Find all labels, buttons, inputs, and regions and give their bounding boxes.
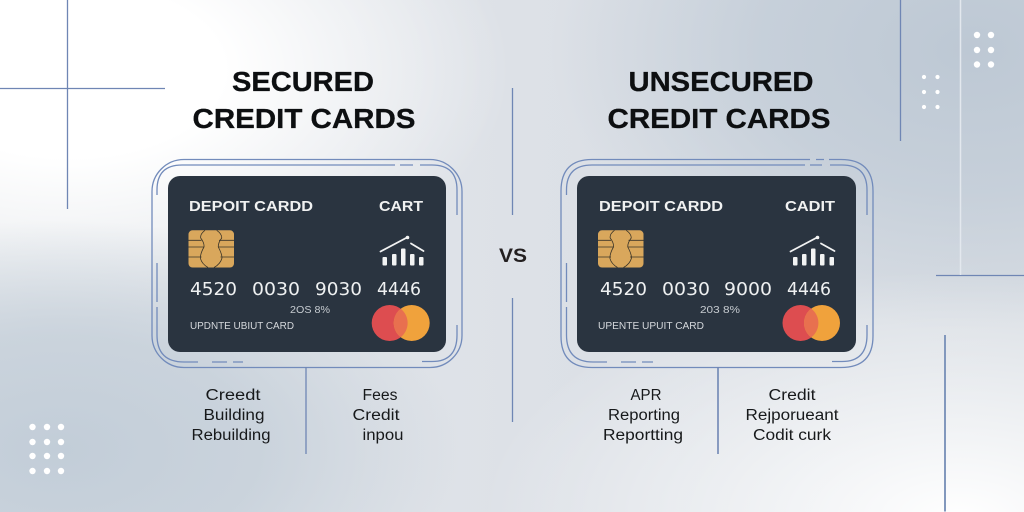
- card number: 4520: [190, 279, 237, 300]
- icon: card network circles: [372, 305, 430, 341]
- icon: bar chart with roof: [380, 236, 424, 266]
- icon: bar chart with roof: [790, 236, 834, 266]
- icon: chip: [598, 230, 644, 268]
- icon: chip: [188, 230, 234, 268]
- text block: secured right column: [352, 387, 404, 444]
- text block: secured right column: Credit: [352, 407, 400, 424]
- title: secured credit cards: SECURED: [232, 66, 374, 97]
- text block: secured left column: [192, 387, 270, 444]
- text block: secured left column: Building: [204, 407, 264, 424]
- card number: [190, 279, 421, 300]
- card type: CART: [379, 198, 423, 215]
- text block: unsecured right column: Rejporueant: [746, 407, 839, 424]
- card number: 9030: [315, 279, 362, 300]
- title: secured credit cards: CREDIT CARDS: [192, 103, 416, 134]
- text block: unsecured left column: Reportting: [603, 427, 683, 444]
- card number: 0030: [662, 279, 710, 300]
- text block: secured right column: Fees: [362, 387, 398, 404]
- card number: [600, 279, 831, 300]
- text block: secured left column: Creedt: [206, 387, 261, 404]
- title: unsecured credit cards: [608, 66, 830, 134]
- title: unsecured credit cards: UNSECURED: [628, 66, 814, 97]
- card number: 4446: [787, 279, 831, 300]
- panel: unsecured card: [561, 160, 873, 368]
- icon: card network circles: [782, 305, 840, 341]
- card outlines: [152, 160, 462, 368]
- title: secured credit cards: [192, 66, 416, 134]
- text block: unsecured right column: Codit curk: [753, 427, 831, 444]
- vs label: VS: [499, 246, 527, 267]
- text block: unsecured right column: [746, 387, 839, 444]
- decorative dots: top right large: [974, 32, 994, 68]
- text block: unsecured left column: APR: [630, 387, 662, 404]
- text block: unsecured right column: Credit: [768, 387, 816, 404]
- card outlines: [561, 160, 873, 368]
- card number: 0030: [252, 279, 300, 300]
- text block: secured right column: inpou: [362, 427, 404, 444]
- card body: [168, 176, 446, 352]
- card number: 4520: [600, 279, 647, 300]
- panel: secured card: [152, 160, 462, 368]
- decorative dots: top right small: [922, 75, 940, 109]
- text block: unsecured left column: Reporting: [608, 407, 680, 424]
- card number: 4446: [377, 279, 421, 300]
- card body: [577, 176, 856, 352]
- card number: 9000: [724, 279, 772, 300]
- card date: 2OS 8%: [290, 305, 330, 316]
- card label: DEPOIT CARDD: [189, 198, 313, 215]
- cardholder: UPENTE UPUIT CARD: [598, 321, 704, 332]
- text block: secured left column: Rebuilding: [192, 427, 270, 444]
- text block: unsecured left column: [603, 387, 683, 444]
- card label: DEPOIT CARDD: [599, 198, 723, 215]
- card type: CADIT: [785, 198, 835, 215]
- cardholder: UPDNTE UBIUT CARD: [190, 321, 294, 332]
- decorative dots: bottom left: [29, 424, 64, 474]
- card date: 203 8%: [700, 305, 740, 316]
- title: unsecured credit cards: CREDIT CARDS: [608, 103, 830, 134]
